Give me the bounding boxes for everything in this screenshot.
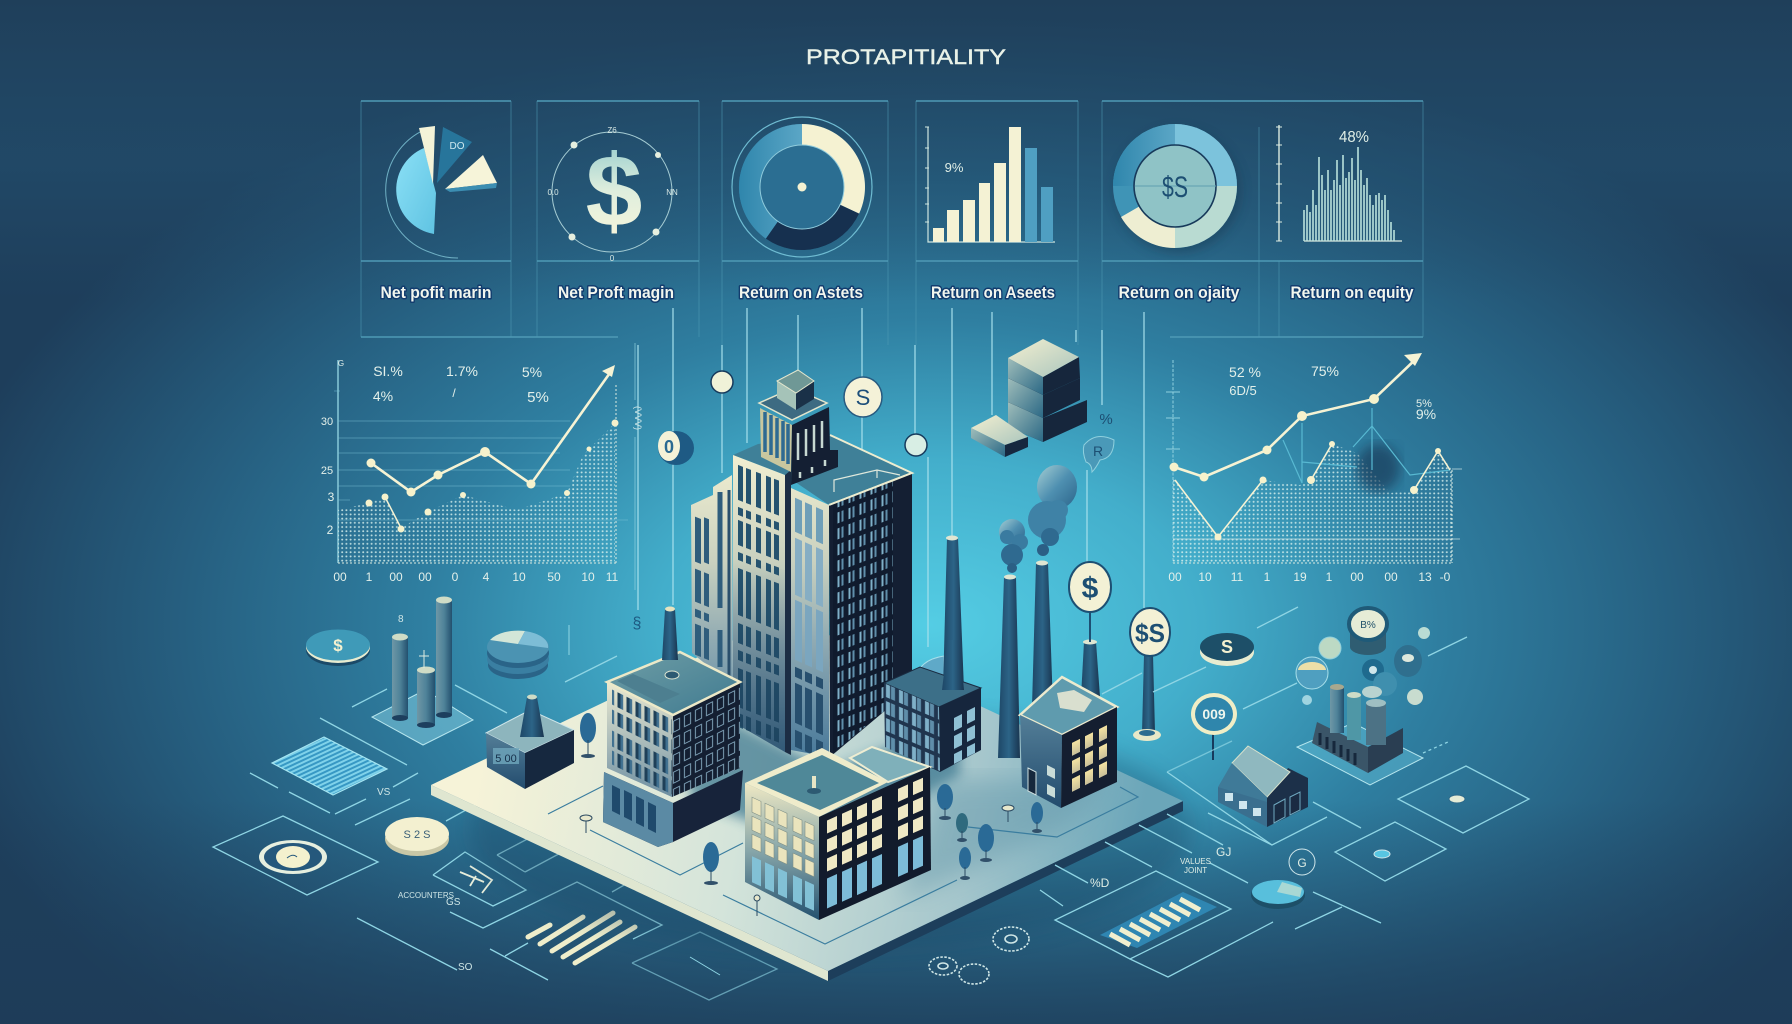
panel 2: dollar icon with orbit xyxy=(547,126,678,263)
left line chart: 2 xyxy=(327,523,334,537)
cookie coin xyxy=(385,817,449,856)
squiggle glyph: § xyxy=(633,615,641,632)
left line chart: 5% xyxy=(527,389,549,406)
wave chart tile xyxy=(272,737,387,795)
floating bubbles and coin: B% xyxy=(1360,620,1376,631)
gear icons bottom centre xyxy=(929,927,1029,984)
title: PROTAPITIALITY xyxy=(806,46,1006,69)
left line chart: 30 xyxy=(321,416,333,428)
wing 3 lattice xyxy=(733,455,785,752)
main roof xyxy=(745,748,888,817)
009 sign: 009 xyxy=(1202,706,1226,722)
panel labels: Return on Aseets xyxy=(931,283,1055,302)
connector circles xyxy=(658,371,927,465)
dome behind stack xyxy=(916,656,944,688)
small floor captions, left: GS xyxy=(446,897,461,908)
left line chart: 0 xyxy=(452,570,459,584)
city platform xyxy=(431,615,1190,981)
left line chart: 00 xyxy=(389,570,403,584)
left line chart: G xyxy=(338,359,344,368)
panel 2: dollar icon with orbit: Z6 xyxy=(607,126,617,135)
left line chart xyxy=(321,343,643,590)
small circled glyph xyxy=(1289,849,1315,875)
left line chart: 4 xyxy=(483,570,490,584)
right line chart: 19 xyxy=(1293,570,1307,584)
panel 1: pie chart icon xyxy=(386,126,497,258)
left line chart: 00 xyxy=(333,570,347,584)
building B4 lit windows xyxy=(1020,677,1117,808)
small circled glyph: G xyxy=(1297,856,1307,870)
panel 2: dollar icon with orbit: 0.0 xyxy=(547,188,559,197)
left line chart: 5% xyxy=(522,364,542,380)
roof xyxy=(607,652,740,715)
dollar sign 1 on short stack: $ xyxy=(1082,572,1099,605)
small pie on the floor xyxy=(1251,880,1305,909)
building B3 behind right xyxy=(884,667,981,772)
left line chart: 1.7% xyxy=(446,363,478,379)
trees xyxy=(580,713,1043,885)
cream bar tile xyxy=(528,913,635,963)
tile glyph bottom centre xyxy=(690,957,720,975)
panel labels xyxy=(380,283,1414,302)
smoke stack at centre xyxy=(943,536,964,690)
right line chart: 1 xyxy=(1264,570,1271,584)
smoke stack B with smoke xyxy=(1028,465,1077,707)
left line chart: 4% xyxy=(373,388,393,404)
panel labels: Return on ojaity xyxy=(1118,283,1240,302)
small lamps on platform xyxy=(580,805,1014,916)
connector lines from panels to the city xyxy=(638,308,1144,647)
panel labels: Return on equity xyxy=(1290,283,1414,302)
right line chart: -0 xyxy=(1440,570,1451,584)
small tile glyph xyxy=(460,866,492,893)
right line chart: 11 xyxy=(1231,570,1244,584)
left wall with window rows xyxy=(607,682,673,797)
left line chart: (VVV) xyxy=(633,406,643,430)
coin: right dollar: S xyxy=(1221,637,1233,657)
panel 2: dollar icon with orbit: NN xyxy=(666,188,678,197)
panel 4: bar chart icon xyxy=(925,127,1055,242)
small floor captions, left xyxy=(377,614,473,973)
small floor captions, left: SO xyxy=(458,962,473,973)
dollar sign 2 on pole xyxy=(1130,608,1170,741)
right line chart: 5% xyxy=(1416,398,1432,410)
panel 5: coin gauge icon xyxy=(1113,124,1240,252)
small floor captions, right: VALUES xyxy=(1180,857,1211,866)
right line chart: 10 xyxy=(1198,570,1212,584)
left line chart: 25 xyxy=(321,465,333,477)
small box xyxy=(971,415,1028,457)
panel 3: donut chart icon xyxy=(732,117,872,257)
009 sign xyxy=(1191,693,1237,760)
left line chart: 1 xyxy=(366,570,373,584)
left line chart: / xyxy=(452,386,456,400)
front left office building xyxy=(603,606,743,847)
right line chart: 1 xyxy=(1326,570,1333,584)
mini factory xyxy=(1297,684,1423,785)
small factory block with cone chimney: 5 00 xyxy=(495,753,517,765)
box pile top right xyxy=(1008,339,1087,442)
panel 2: dollar icon with orbit: $ xyxy=(586,134,642,248)
connector circles: 0 xyxy=(664,437,674,457)
right line chart: 52 % xyxy=(1229,364,1261,380)
left line chart: 00 xyxy=(418,570,432,584)
smoke stack A with smoke xyxy=(998,519,1028,758)
tower right dark face xyxy=(829,473,912,757)
right line chart: 75% xyxy=(1311,363,1339,379)
floating bubbles and coin xyxy=(1296,608,1430,705)
podium xyxy=(603,770,743,847)
left smokestack cluster xyxy=(392,596,452,728)
coin: left dollar: $ xyxy=(333,636,343,655)
cookie coin: S 2 S xyxy=(404,829,430,841)
connector circles: S xyxy=(856,385,870,410)
small floor captions, left: ACCOUNTERS xyxy=(398,891,454,900)
left line chart: 11 xyxy=(606,570,619,584)
small floor captions, left: 8 xyxy=(398,614,404,625)
right line chart: 6D/5 xyxy=(1229,383,1257,398)
right line chart: 9% xyxy=(1416,406,1436,422)
small factory block with cone chimney xyxy=(486,694,574,789)
tower roof xyxy=(733,435,912,505)
right wall outlined windows xyxy=(672,682,740,797)
panel 6: spiky histogram icon: 48% xyxy=(1339,129,1369,146)
diamond under left stacks xyxy=(372,690,473,745)
ring badge xyxy=(259,840,327,874)
stacked pie discs xyxy=(487,631,549,679)
right wall xyxy=(819,767,931,920)
dollar sign 2 on pole: $S xyxy=(1135,618,1165,648)
wing 1 xyxy=(691,495,713,670)
small floor captions, left: VS xyxy=(377,787,391,798)
right line chart xyxy=(1166,353,1462,584)
right stripe chart tile xyxy=(1100,892,1217,948)
panel labels: Net pofit marin xyxy=(380,283,492,302)
chimney xyxy=(662,606,678,660)
dark gap between wings xyxy=(785,470,791,755)
crown block xyxy=(759,370,838,485)
panel 4: bar chart icon: 9% xyxy=(945,160,964,175)
left line chart: SI.% xyxy=(373,363,403,379)
panel labels: Return on Astets xyxy=(739,283,863,302)
wing 2 xyxy=(713,475,733,690)
panel 2: dollar icon with orbit: 0 xyxy=(610,254,615,263)
panel grid: six metric panels xyxy=(361,101,1423,345)
dollar sign 1 on short stack xyxy=(1069,562,1111,697)
small floor captions, right: GJ xyxy=(1216,845,1231,859)
percent glyph and speech curl: % xyxy=(1099,411,1113,428)
wing 4 pale windows xyxy=(791,488,829,759)
percent glyph and speech curl xyxy=(1083,411,1114,472)
front building xyxy=(745,747,931,920)
right line chart: 00 xyxy=(1384,570,1398,584)
small floor captions, right: JOINT xyxy=(1184,866,1207,875)
left wall xyxy=(745,783,819,920)
right line chart: 00 xyxy=(1168,570,1182,584)
percent glyph and speech curl: R xyxy=(1093,443,1103,459)
central tower xyxy=(691,370,912,759)
left line chart: 10 xyxy=(581,570,595,584)
diamond tile icons xyxy=(1374,795,1465,858)
panel 1: pie chart icon: DO xyxy=(450,141,465,152)
house xyxy=(1218,746,1308,827)
re-draw of dark chimney base over B3 xyxy=(942,640,964,690)
panel 5: coin gauge icon: $S xyxy=(1162,171,1188,204)
floor diagrams, right side xyxy=(1040,607,1529,977)
coin: left dollar xyxy=(306,630,370,666)
left line chart: 50 xyxy=(547,570,561,584)
left line chart: 10 xyxy=(512,570,526,584)
panel 6: spiky histogram icon xyxy=(1276,125,1402,241)
rear roof wing xyxy=(850,747,930,782)
left line chart: 3 xyxy=(328,490,335,504)
outlined floor diagrams, left side xyxy=(213,625,777,1000)
panel labels: Net Proft magin xyxy=(558,283,674,302)
right line chart: 13 xyxy=(1418,570,1432,584)
coin: right dollar xyxy=(1200,633,1254,666)
right line chart: 00 xyxy=(1350,570,1364,584)
small floor captions, right xyxy=(1090,845,1231,890)
small floor captions, right: %D xyxy=(1090,876,1110,890)
